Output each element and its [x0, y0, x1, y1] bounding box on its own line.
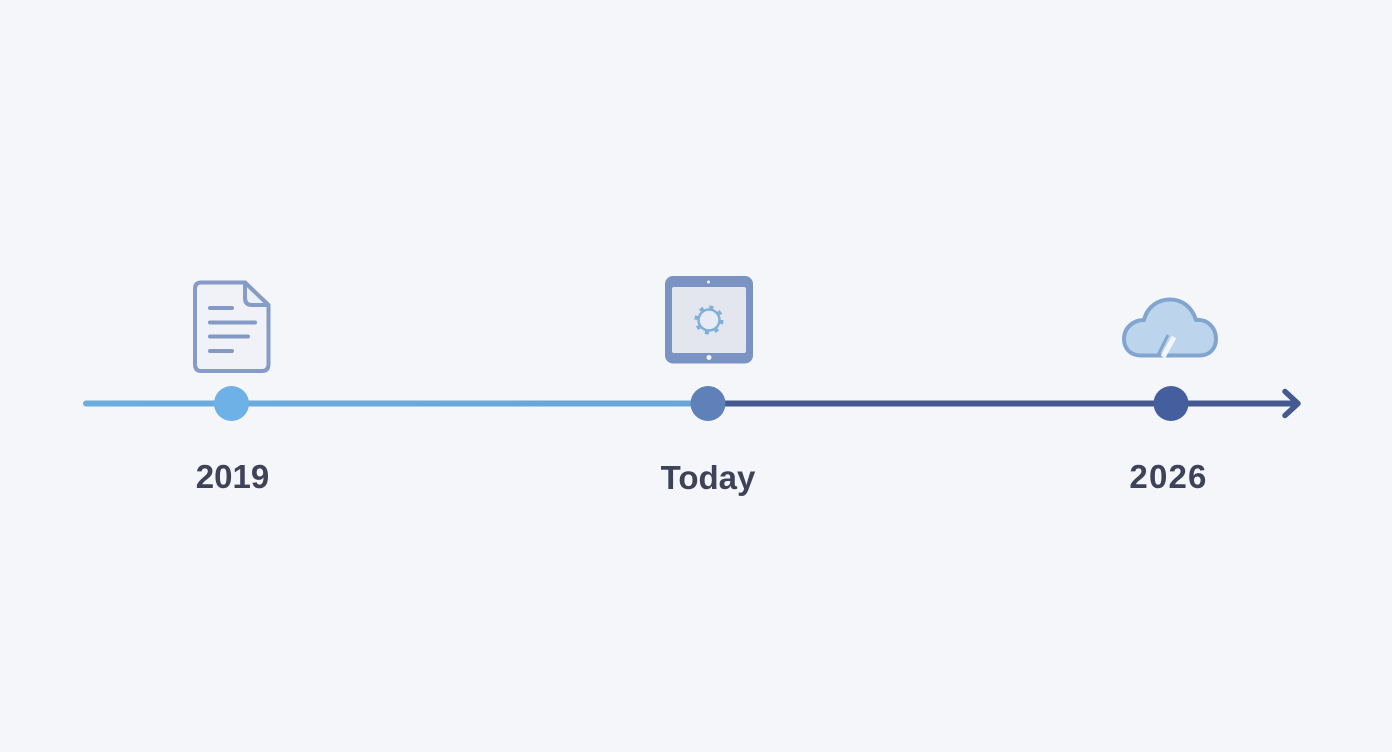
future line segment [716, 400, 1294, 406]
cloud slash [1163, 337, 1174, 357]
icon: tablet with gear [665, 276, 753, 364]
gear [696, 308, 722, 332]
marker: Today [690, 386, 726, 421]
arrow head [1285, 392, 1298, 416]
marker: 2026 [1154, 386, 1188, 421]
icon: cloud [1124, 300, 1216, 357]
label: 2019: 2019 [196, 458, 269, 495]
label: Today: Today [661, 459, 756, 496]
timeline [86, 386, 1298, 421]
icon: document [195, 282, 268, 371]
label: 2026: 2026 [1129, 458, 1208, 495]
past line segment [86, 400, 700, 406]
marker: 2019 [214, 386, 249, 421]
